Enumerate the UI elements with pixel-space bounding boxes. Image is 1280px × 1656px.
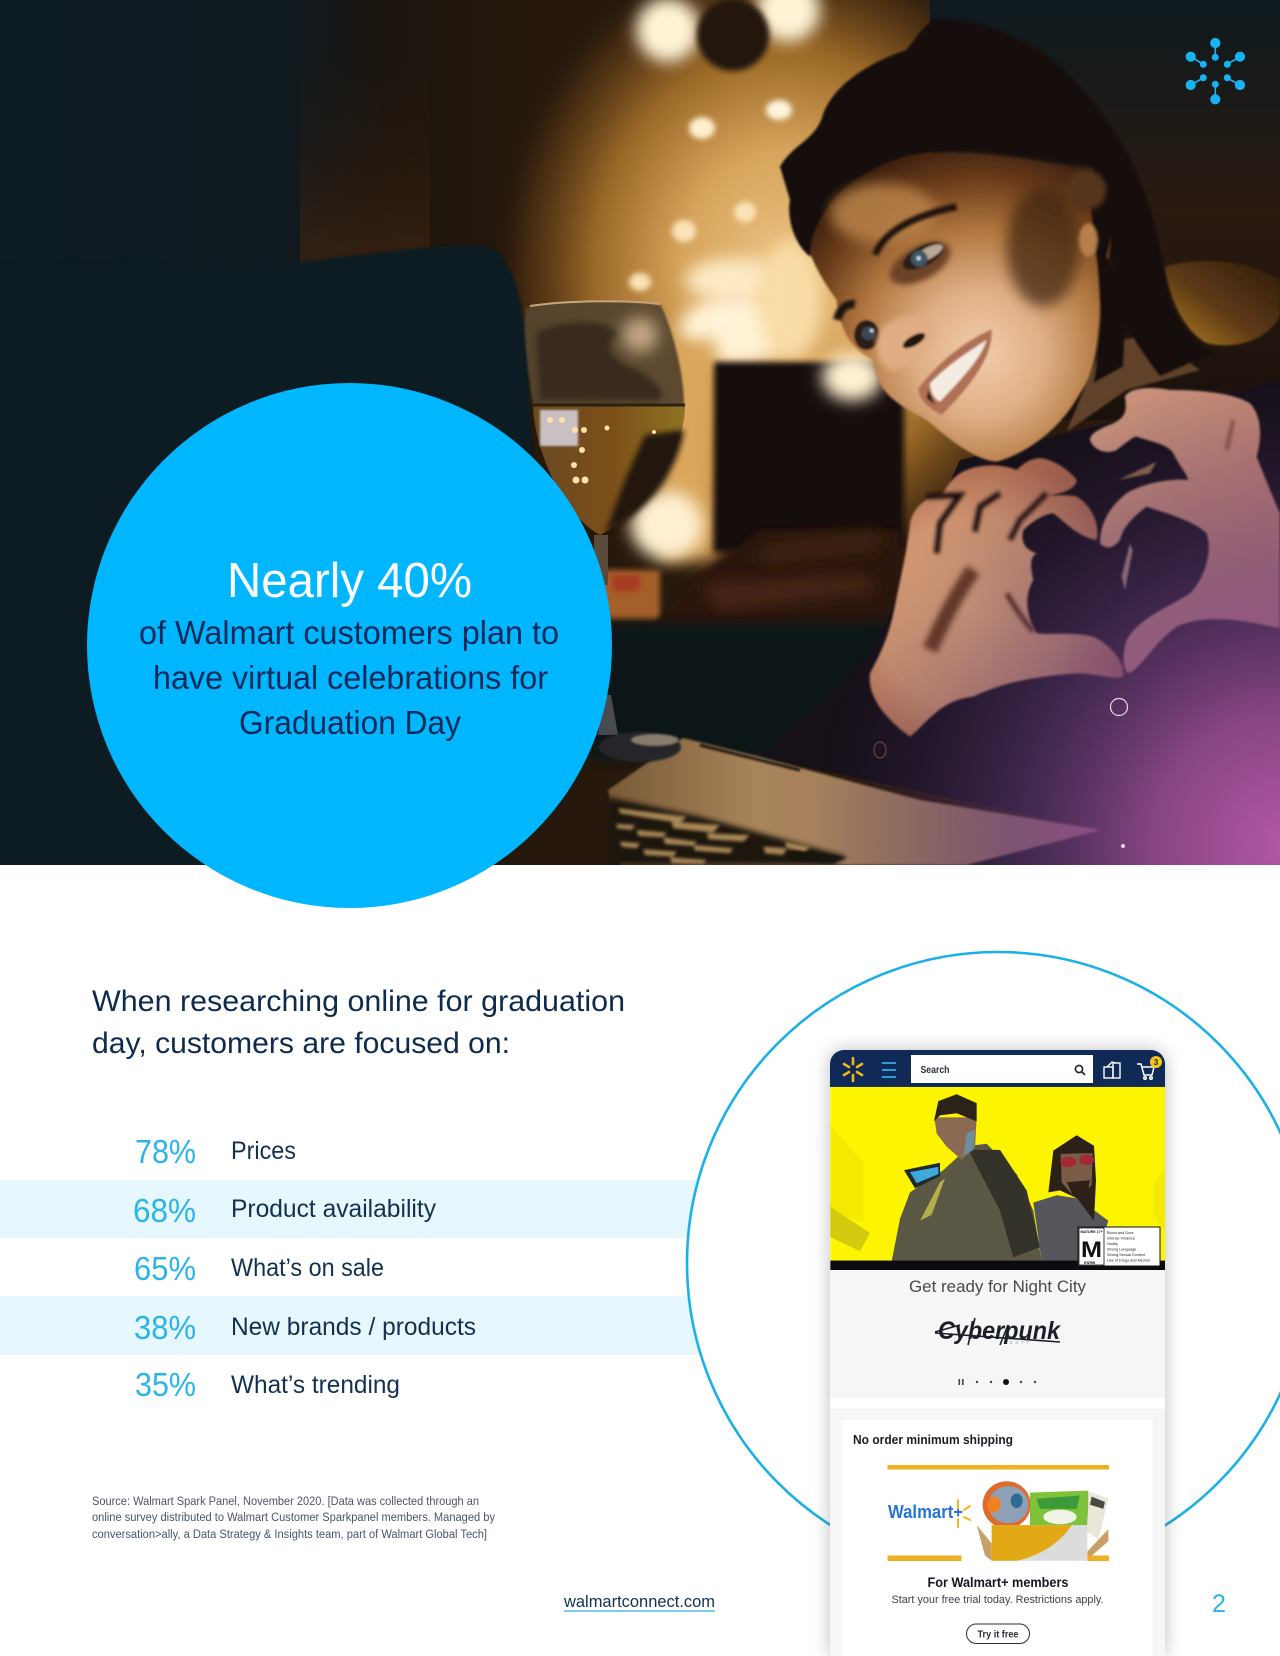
- game logo: 2077: [1010, 1340, 1032, 1345]
- row: product availability: 68%: [133, 1192, 196, 1229]
- shirt detail in the heart: [1122, 543, 1133, 590]
- card title: No order minimum shipping: [853, 1432, 1013, 1447]
- ESRB rating box: [1078, 1227, 1160, 1266]
- ESRB rating box: Blood and Gore: [1107, 1231, 1134, 1235]
- laptop: [607, 738, 1100, 865]
- carousel dots: [958, 1379, 1036, 1385]
- hair: [780, 20, 1213, 377]
- stat description: [139, 614, 559, 741]
- row: prices: [135, 1133, 296, 1170]
- chair silhouette: [300, 244, 534, 458]
- icon: gift: [1104, 1062, 1120, 1078]
- product box art: [977, 1481, 1108, 1561]
- section heading: [92, 985, 625, 1060]
- stat headline: Nearly 40%: [227, 554, 472, 608]
- source note: conversation>ally, a Data Strategy & Insights team, part of Walmart Global Tech]: [92, 1529, 487, 1541]
- stat description: Graduation Day: [239, 704, 461, 741]
- eye: [902, 241, 944, 271]
- offer text: Start your free trial today. Restrictions apply.: [892, 1594, 1104, 1606]
- face: [810, 153, 1111, 462]
- row: new brands / products: [134, 1309, 476, 1346]
- row: prices: Prices: [231, 1137, 296, 1165]
- shipping section background: [830, 1408, 1165, 1656]
- ESRB rating box: Intense Violence: [1107, 1236, 1135, 1240]
- black base band: [830, 1261, 1165, 1270]
- upper eye socket shadow: [886, 238, 954, 288]
- stem: [594, 535, 608, 585]
- woman's head: [780, 20, 1280, 462]
- section heading: When researching online for graduation: [92, 985, 625, 1018]
- row: prices: 78%: [135, 1133, 196, 1170]
- icon: spark: [958, 1500, 970, 1527]
- wine glass: [525, 301, 685, 585]
- wine: [533, 405, 685, 535]
- source note: online survey distributed to Walmart Customer Sparkpanel members. Managed by: [92, 1512, 495, 1524]
- shirt buttons: [874, 698, 1128, 848]
- ESRB rating box: Strong Sexual Content: [1107, 1253, 1146, 1257]
- dark room top right: [930, 0, 1280, 420]
- hero: game artwork: [830, 1087, 1165, 1270]
- section heading: day, customers are focused on:: [92, 1027, 510, 1060]
- row: new brands / products: 38%: [134, 1309, 196, 1346]
- ESRB rating box: Strong Language: [1107, 1248, 1136, 1252]
- button: Try it free: [978, 1630, 1019, 1640]
- source note: [92, 1496, 495, 1541]
- neck: [1067, 333, 1200, 432]
- glass bowl upper part: [525, 301, 684, 405]
- right hand: [1090, 388, 1280, 673]
- row: what's trending: What’s trending: [231, 1371, 400, 1399]
- hands forming a heart: [870, 388, 1280, 737]
- search box: Search: [920, 1065, 950, 1076]
- ESRB rating box: ESRB: [1084, 1260, 1095, 1265]
- magenta gradient overlay: [842, 399, 1280, 865]
- ear: [1079, 223, 1098, 257]
- table and blanket: [590, 530, 920, 762]
- decorative blue ring behind phone: [687, 952, 1280, 1574]
- icon: cart: [1137, 1064, 1154, 1079]
- source note: Source: Walmart Spark Panel, November 2020. [Data was collected through an: [92, 1496, 479, 1508]
- stat description: of Walmart customers plan to: [139, 614, 559, 651]
- row: what's trending: 35%: [135, 1366, 196, 1403]
- dark furniture block behind the glass: [714, 362, 904, 552]
- page number: 2: [1212, 1590, 1226, 1618]
- list of research priorities: [0, 1133, 700, 1403]
- shipping card: [842, 1420, 1152, 1656]
- row: product availability: Product availability: [231, 1195, 436, 1223]
- icon: menu: [882, 1063, 896, 1077]
- row: what's on sale: What’s on sale: [231, 1254, 384, 1282]
- condensation patch: [536, 323, 662, 400]
- row: what's on sale: [134, 1250, 384, 1287]
- torso in dark sweater: [760, 380, 1280, 865]
- search box: [911, 1055, 1093, 1083]
- bokeh lights: [629, 0, 822, 560]
- row: product availability: [133, 1192, 436, 1229]
- left hand: [870, 458, 1123, 737]
- footer link: walmartconnect.com: [563, 1592, 715, 1611]
- row: what's on sale: 65%: [134, 1250, 196, 1287]
- game logo: Cyberpunk: [938, 1317, 1061, 1345]
- offer title: For Walmart+ members: [928, 1574, 1069, 1590]
- caption: Get ready for Night City: [909, 1278, 1087, 1296]
- wordmark: Walmart+: [888, 1502, 963, 1522]
- callout circle with headline stat: [87, 383, 612, 908]
- button: [966, 1624, 1030, 1644]
- nose: [876, 316, 935, 370]
- row: what's trending: [135, 1366, 400, 1403]
- ESRB rating box: M: [1081, 1237, 1102, 1262]
- collar highlight: [1118, 462, 1157, 480]
- character two: [1033, 1135, 1108, 1261]
- warm lit wall: [508, 0, 978, 572]
- icon: yellow spark: [844, 1058, 862, 1081]
- carousel caption panel: [830, 1270, 1165, 1398]
- row: new brands / products: New brands / products: [231, 1313, 476, 1341]
- icon: Walmart Connect network spark logo: [1186, 38, 1245, 104]
- reflection: [540, 410, 578, 446]
- phone mockup: [830, 1050, 1165, 1656]
- ESRB rating box: Nudity: [1107, 1242, 1118, 1246]
- eyebrow: [875, 207, 957, 255]
- cart badge: 3: [1154, 1058, 1159, 1067]
- small bright bokeh by the face: [822, 353, 882, 401]
- mouth: [918, 329, 992, 415]
- cart badge: [1150, 1056, 1162, 1068]
- ESRB rating box: MATURE 17+: [1080, 1230, 1103, 1234]
- Walmart+ banner: [888, 1465, 1109, 1561]
- golden curls on shoulder: [1165, 261, 1280, 345]
- second eye: [837, 304, 879, 350]
- curtain at left of the wall: [300, 133, 430, 262]
- ESRB rating box: Use of Drugs and Alcohol: [1107, 1258, 1150, 1262]
- panel: hero photo of woman making a heart with her hands: [0, 0, 1280, 865]
- phone header bar: [830, 1050, 1165, 1087]
- stat description: have virtual celebrations for: [153, 659, 548, 696]
- keyboard: [607, 797, 847, 865]
- wine glass foot: [598, 695, 681, 762]
- character one: [892, 1094, 1042, 1261]
